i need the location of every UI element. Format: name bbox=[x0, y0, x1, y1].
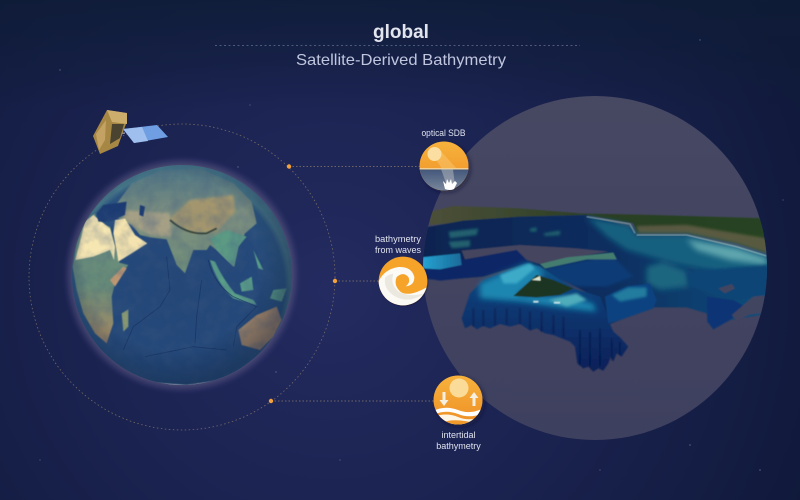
globe bbox=[62, 155, 302, 395]
land: Antarctica bbox=[157, 380, 212, 385]
subtitle: Satellite-Derived Bathymetry bbox=[296, 52, 506, 69]
label: bathymetry from waves: bathymetry bbox=[375, 234, 421, 245]
icon: optical SDB bbox=[419, 142, 469, 192]
satellite bbox=[93, 110, 168, 154]
arrow: down bbox=[440, 392, 448, 406]
connector: bathymetry from waves bbox=[333, 279, 379, 283]
grey holes bbox=[462, 245, 608, 264]
connector: intertidal bathymetry bbox=[269, 399, 434, 403]
ocean ridges bbox=[123, 257, 257, 357]
land: Asia bbox=[113, 168, 257, 273]
land strip bbox=[430, 206, 768, 253]
label: bathymetry from waves bbox=[375, 234, 421, 256]
connector: optical SDB bbox=[287, 164, 420, 169]
main atoll wall bbox=[462, 263, 628, 372]
arrow: up bbox=[470, 392, 478, 406]
back lagoon bbox=[420, 215, 770, 329]
label: bathymetry from waves: from waves bbox=[375, 245, 421, 256]
title: global bbox=[373, 22, 429, 43]
land: Africa bbox=[73, 213, 128, 343]
label: optical SDB: optical SDB bbox=[422, 128, 466, 138]
land: Indonesia bbox=[210, 250, 287, 305]
label: intertidal bathymetry bbox=[436, 430, 481, 451]
title divider bbox=[215, 44, 580, 46]
land: Australia bbox=[238, 307, 282, 350]
label: intertidal bathymetry: intertidal bbox=[441, 430, 476, 440]
label: intertidal bathymetry: bathymetry bbox=[436, 441, 481, 451]
water: Black Sea and Mediterranean bbox=[97, 202, 145, 222]
solar panel bbox=[123, 125, 168, 143]
icon: bathymetry from waves bbox=[378, 256, 428, 306]
surface texture bbox=[74, 176, 286, 384]
wall dark streaks bbox=[473, 308, 620, 367]
satellite body bbox=[93, 110, 126, 154]
coral bbox=[443, 179, 457, 190]
front reef blocks bbox=[605, 283, 657, 323]
land: Madagascar bbox=[122, 309, 128, 332]
icon: intertidal bathymetry bbox=[433, 376, 484, 430]
bathymetry 3D terrain bbox=[420, 206, 770, 372]
island bbox=[513, 275, 573, 297]
orbit ring bbox=[29, 124, 335, 430]
left shelf panel bbox=[422, 250, 532, 281]
inner lagoon bbox=[544, 259, 632, 288]
sand spit bbox=[540, 253, 617, 268]
land: Arabia bbox=[113, 218, 147, 262]
grey circle panel bbox=[423, 96, 767, 440]
